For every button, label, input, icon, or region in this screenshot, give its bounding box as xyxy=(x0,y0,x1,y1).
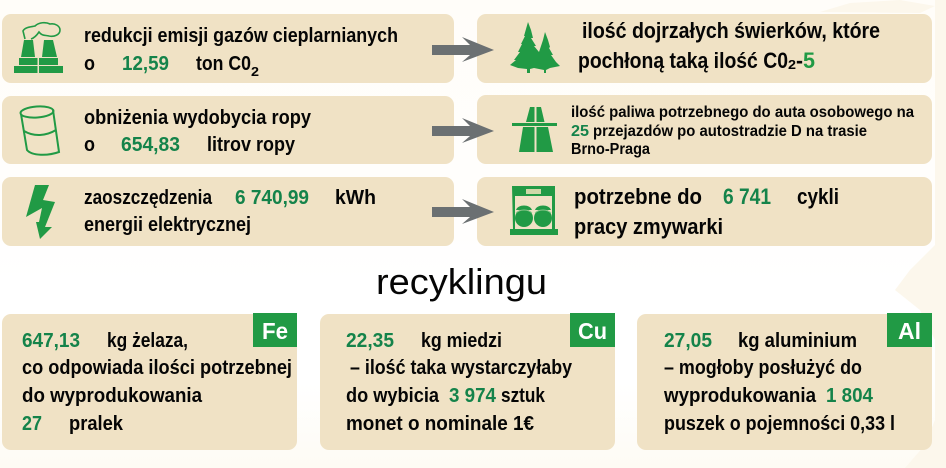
panel: copper xyxy=(320,313,615,450)
text: fuel: ilość paliwa potrzebnego do auta osobowego na xyxy=(571,104,914,121)
text: fuel xyxy=(571,104,914,158)
text: copper: sztuk xyxy=(501,384,545,407)
text: reduction: o xyxy=(84,52,95,75)
text: copper: 3 974 xyxy=(449,384,497,407)
panel: greenhouse gas reduction xyxy=(2,14,454,83)
text: energy xyxy=(84,186,376,236)
panel: dishwasher xyxy=(477,177,932,246)
text: reduction xyxy=(84,24,398,79)
text: copper xyxy=(346,329,573,435)
text: spruce: 2 xyxy=(788,57,796,72)
text: aluminium: wyprodukowania xyxy=(663,384,817,407)
text: reduction: 2 xyxy=(251,64,259,79)
text: aluminium: 27,05 xyxy=(664,329,712,352)
text: iron: 27 xyxy=(22,412,42,435)
text: aluminium: – mogłoby posłużyć do xyxy=(664,356,862,379)
panel: iron xyxy=(2,313,297,450)
text: fuel: Brno-Praga xyxy=(571,141,650,158)
text: fuel: przejazdów po autostradzie D na trasie xyxy=(593,123,867,140)
text: iron: kg żelaza, xyxy=(107,329,188,352)
text: energy: energii elektrycznej xyxy=(84,213,251,236)
text: fuel: 25 xyxy=(571,123,589,140)
text: spruce xyxy=(578,18,880,73)
text: copper: do wybicia xyxy=(346,384,440,407)
icon: spruce trees xyxy=(510,22,560,73)
text: dishwasher: pracy zmywarki xyxy=(574,214,723,239)
panel: fuel on motorway xyxy=(477,95,932,164)
badge: Al: Al xyxy=(898,318,921,344)
panel: spruce trees xyxy=(477,14,932,83)
panel: energy saving xyxy=(2,177,454,246)
text: copper: kg miedzi xyxy=(421,329,502,352)
icon: lightning bolt xyxy=(26,185,55,239)
text: reduction: redukcji emisji gazów cieplarnianych xyxy=(84,24,398,47)
text: dishwasher xyxy=(574,184,839,239)
text: copper: – ilość taka wystarczyłaby xyxy=(350,356,573,379)
text: spruce: - xyxy=(796,48,803,73)
text: oil: obniżenia wydobycia ropy xyxy=(84,106,312,129)
badge: Fe xyxy=(253,313,297,347)
text: reduction: ton C0 xyxy=(196,52,251,75)
text: spruce: ilość dojrzałych świerków, które xyxy=(582,18,880,43)
text: aluminium xyxy=(663,329,895,435)
badge: Fe: Fe xyxy=(262,318,288,344)
text: iron: 647,13 xyxy=(22,329,80,352)
text: iron xyxy=(22,329,292,435)
text: copper: monet o nominale 1€ xyxy=(346,412,535,435)
text: oil: litrov ropy xyxy=(207,133,296,156)
text: reduction: 12,59 xyxy=(122,52,169,75)
text: aluminium: 1 804 xyxy=(826,384,874,407)
panel: oil extraction xyxy=(2,96,454,164)
text: oil: o xyxy=(84,133,95,156)
text: iron: do wyprodukowania xyxy=(22,384,203,407)
text: aluminium: kg aluminium xyxy=(738,329,857,352)
icon: oil barrel xyxy=(20,105,59,155)
text: dishwasher: cykli xyxy=(797,184,839,209)
badge: Cu xyxy=(570,313,615,347)
text: energy: 6 740,99 xyxy=(235,186,309,209)
arrow: row 3 xyxy=(432,199,494,224)
text: energy: kWh xyxy=(335,186,376,209)
arrow: row 2 xyxy=(432,118,494,143)
icon: motorway xyxy=(512,107,557,152)
text: oil xyxy=(84,106,312,156)
arrow: row 1 xyxy=(432,37,494,62)
icon: power plant xyxy=(14,23,63,73)
text: dishwasher: potrzebne do xyxy=(574,184,702,209)
text: dishwasher: 6 741 xyxy=(723,184,771,209)
text: oil: 654,83 xyxy=(121,133,180,156)
text: spruce: 5 xyxy=(803,48,815,73)
text: energy: zaoszczędzenia xyxy=(84,186,212,209)
text: copper: 22,35 xyxy=(346,329,394,352)
title: recyklingu xyxy=(376,261,547,302)
badge: Al xyxy=(887,313,932,347)
badge: Cu: Cu xyxy=(578,318,607,344)
text: spruce: pochłoną taką ilość C0 xyxy=(578,48,788,73)
text: iron: pralek xyxy=(69,412,124,435)
text: iron: co odpowiada ilości potrzebnej xyxy=(22,356,292,379)
panel: aluminium xyxy=(637,313,932,450)
text: aluminium: puszek o pojemności 0,33 l xyxy=(664,412,895,435)
icon: dishwasher xyxy=(510,186,558,235)
